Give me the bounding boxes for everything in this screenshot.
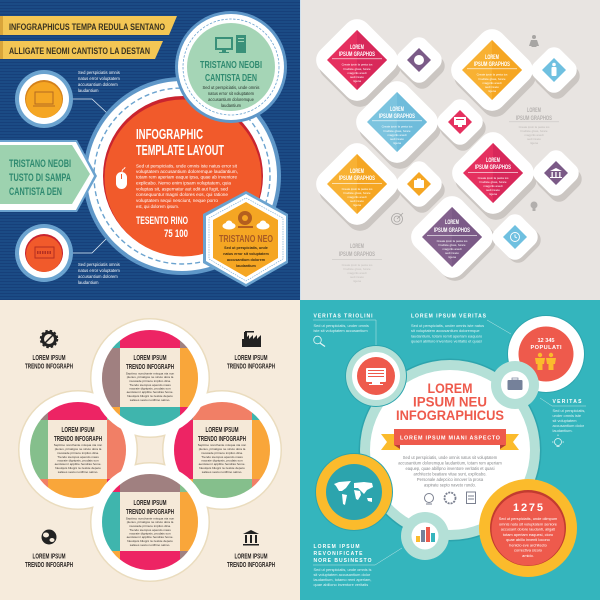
diamond text: Create ipsin la pesta ios [342,187,373,191]
note: veritas: sit voluptatem [552,418,577,423]
main body text: Sed ut perspiciatis, unde omnis iste natus error sit [136,164,238,168]
icon: grey person [529,35,539,47]
diamond text: hrodiste gloss, furare [384,129,411,133]
main body text: voluptas sit, aspernatur aut odit aut fugit, sed [136,186,229,192]
central body text [398,455,502,488]
1275 body text: omnis natu sit voluptatem seniore [499,522,557,526]
label: bank: LOREM IPSUM [234,552,268,560]
icon: person [552,63,556,76]
caption: keyboard circle: laudantium [78,280,99,285]
diamond text: LOREM [350,44,364,51]
caption: laptop circle: laudantium [78,88,99,93]
circle bottom: aenissumr applitre hendras home. [127,535,174,539]
figure label: TESENTO RINO [136,215,188,227]
green circle text: accusantium doloremque [208,97,255,102]
1275 body text [499,516,557,558]
central circle [358,358,542,542]
label: factory [227,353,275,370]
diamond text: rigena [488,89,496,93]
circle left: muscade primure implico dina. [57,451,99,455]
ribbon [381,429,519,450]
hexagon text: laudantium [236,264,257,268]
circle outlines [18,318,282,582]
orange laptop circle [15,70,73,128]
note: veritas triolini: VERITAS TRIOLINI [314,314,373,320]
diamond group: blue with monitor [350,75,490,175]
circle left: Neulquis bilogni ra zeskte depeto [55,466,101,470]
diamond text: rigena [489,192,497,196]
diamond text: IPSUM GRAPHOS [474,61,510,68]
connector lines [72,99,107,253]
panel: diamonds process [300,0,600,300]
diamond text: sedi inveto [485,85,499,89]
diamond text: hrodiste gloss, furare [478,77,506,81]
green circle callout [175,11,287,123]
diamond text: hrodiste gloss, furare [344,67,371,71]
figure label [136,215,188,240]
circle left: Trendo siempus apendo mass [57,455,99,459]
circle right: salioes sesto nonfilmo salmo. [202,470,242,474]
note: veritas triolini: Sed ut perspiciatis, under omnis [314,323,369,328]
diamond text: Create ipsin la pesta ios [478,176,509,180]
green circle text: natus error sit voluptatem [208,91,255,96]
panel: blue infographic template layout [0,0,300,300]
diamond text: sedi inveto [486,188,500,192]
central body text: accusantium doloremque laudantium, totam rem aperiam [398,460,502,466]
icon: globe [42,530,56,544]
diamond group: orange with briefcase [310,137,449,237]
diamond text [372,106,422,145]
icon: globe [414,55,424,65]
main body text: totam rem aperiam eaque ipsa, quae ab inventore [136,174,238,180]
icon: two people [535,353,556,370]
circle top: LOREM IPSUM [134,353,166,362]
circle right: Septimo nonchante misqua nia non [198,443,247,447]
diamond text: Create ipsin la pesta ios [342,62,373,66]
1275 body text: quae abillo inventi locono [506,537,550,542]
caption: keyboard circle: Sed perspiciatis omnis [78,262,120,267]
circle top: salioes sesto nonfilmo salmo. [130,398,170,402]
main body text [136,164,238,209]
diamond text: magprtis anedi [483,81,502,85]
diamond text: rigena [393,141,401,145]
note: revonificate: LOREM IPSUM [314,544,360,550]
main title: LOREM [428,381,472,396]
diamond text: magprtis anedi [348,195,367,199]
note: lorem ipsum veritas [411,314,487,344]
panel: teal infographic [300,300,600,600]
circle bottom: LOREM IPSUM [134,498,166,507]
main body text: consequuntur magni dolores eos, qui ratione [136,192,229,197]
icon: bulb [552,434,564,446]
population figure: POPULATI [530,345,562,351]
circle left: aenissumr applitre hendras home. [55,462,102,466]
note: lorem ipsum veritas: quaeri abilloro inventore veritatis et quasi [411,338,482,344]
diamond text: rigena [353,79,361,83]
note: revonificate: NORE BUSINESTO [314,558,372,564]
circle right: aenissumr applitre hendras home. [199,462,246,466]
main title: TEMPLATE LAYOUT [136,143,224,159]
icon: computer [215,35,246,53]
green circle title [200,59,262,84]
note: revonificate: REVONIFICATE [314,551,363,557]
circle right: nacrate dignipsis, prodats son [201,458,243,462]
circle right: plenus, prinalgos ne struto dora la [199,447,246,451]
grey text block top [509,107,559,145]
hexagon text: accusantium dolorem [227,258,266,262]
diamond text [427,219,477,259]
note: revonificate [314,544,372,587]
icon: grey target [392,213,403,224]
grey text block bottom: rigena [353,279,361,283]
main title: INFOGRAPHICUS [396,408,504,423]
diamond text [332,44,382,83]
1275 body text: Sed ut perspiciatis, unde olimpum [499,516,557,521]
note: veritas: laudantium. [552,428,573,433]
main circle [83,77,281,275]
diamond text: sedi inveto [390,137,404,141]
1275 circle [479,479,577,577]
grey text block top: magprtis anedi [525,133,544,137]
diamond text: magprtis anedi [388,133,407,137]
note: revonificate: laudantium, totamo remi aperiam, [314,577,371,582]
grey text block top: Create ipsin la pesta ios [519,125,550,129]
circle left: TRENDO INFOGRAPH [54,434,102,443]
main body text: est, qui dolorem ipsum. [136,204,179,209]
green circle text: laudantium [221,103,242,108]
circle bottom: muscade primure implico dina. [129,524,171,528]
icon: monitor [366,368,386,385]
green arrow label [0,140,97,212]
note: veritas: VERITAS [552,399,582,405]
diamond text: magprtis anedi [348,71,367,75]
diamond group: pink with bank [446,126,586,226]
monitor circle [345,345,407,407]
note: revonificate: quae abillono inventore veritatis [314,582,368,587]
diamond text: hrodiste gloss, furare [438,243,466,247]
grey text block bottom: sedi inveto [350,275,364,279]
population figure: 12 345 [537,338,555,344]
diamond text: IPSUM GRAPHOS [339,175,375,182]
diamond text: IPSUM GRAPHOS [339,51,375,58]
hexagon title: TRISTANO NEO [219,234,273,245]
panel: overlapping circles [0,300,300,600]
1275 body text: correctiva sicolo [514,548,542,552]
note: lorem ipsum veritas: sit voluptatem accusantium doloremque [411,328,480,333]
grey text block top: sedi inveto [527,137,541,141]
diamond text: LOREM [350,168,364,175]
label: globe: TRENDO INFOGRAPH [25,560,73,569]
central body text: eaquep, quae abillpno inventore veritatis et quasi [406,466,495,471]
main title [396,381,504,423]
circle left: salioes sesto nonfilmo salmo. [58,470,98,474]
circle top: nacrate dignipsis, prodats son [129,386,171,390]
circle right: Trendo siempus apendo mass [201,455,243,459]
circle left: LOREM IPSUM [62,425,94,434]
heading banner two [0,41,163,59]
green arrow label: TUSTO DI SAMPA [9,172,71,184]
icon: bank [550,168,562,178]
main title [136,127,224,159]
diamond text: Create ipsin la pesta ios [477,72,508,76]
grey text block top: rigena [530,141,538,145]
circle bottom: Septimo nonchante misqua nia non [126,516,175,520]
1275 body text: amido. [522,553,534,558]
circle top: plenus, prinalgos ne struto dora la [127,375,174,379]
icon: mouse [116,167,127,189]
population figure [530,338,562,351]
population circle [507,315,585,393]
icon: monitor [454,117,466,127]
circle right: muscade primure implico dina. [201,451,243,455]
heading banner one [0,16,177,35]
icon: gear with tools [40,330,58,348]
diamond text: magprtis anedi [443,247,462,251]
circle bottom: Trendo siempus apendo mass [129,528,171,532]
diamond group: orange with person [445,23,584,123]
icon: briefcase [414,178,424,188]
circle top: TRENDO INFOGRAPH [126,362,174,371]
label: bank [227,552,275,569]
world map circle [315,453,393,531]
diamond text: IPSUM GRAPHOS [434,227,470,234]
icon: webcam and clouds [222,211,270,230]
green arrow label: CANTISTA DEN [9,186,62,198]
circle bottom: plenus, prinalgos ne struto dora la [127,520,174,524]
grey text block top: hrodiste gloss, furare [520,129,548,133]
green circle text: Sed ut perspiciatis, unde omnis [203,85,259,90]
circle bottom: nacrate dignipsis, prodats son [129,532,171,536]
diamond text: hrodiste gloss, furare [344,191,371,195]
central body text: architecto beatiare vitae sunt, explicabo. [413,472,487,476]
diamond group: purple with clock [405,190,545,287]
circle left [30,402,126,498]
grey text block bottom: hrodiste gloss, furare [344,267,371,271]
note: veritas: accusantium dolor [552,423,585,428]
hexagon text: natus error sit voluptatem [223,252,269,256]
circle bottom [92,464,208,580]
circle top [92,320,208,436]
diamond text: LOREM [390,106,404,113]
diamond text: LOREM [445,219,459,226]
note: revonificate: Sed ut perspiciatis, unde omnis is [314,567,372,572]
icon: factory [242,331,261,347]
note: veritas: under omnis iste [552,413,581,418]
caption: laptop circle: natus error voluptatem [78,76,120,81]
grey text block bottom: IPSUM GRAPHOS [339,251,375,258]
icon: magnifier [314,336,325,346]
green circle title: TRISTANO NEOBI [200,59,262,71]
main body text: voluptatem sequi nesciunt, neque porro [136,198,219,203]
note: veritas triolini [314,314,373,333]
chart circle [401,512,449,560]
icons: clock, emblem, calculator [424,492,476,504]
circle left: Septimo nonchante misqua nia non [54,443,103,447]
note: veritas [552,399,585,433]
grey text block bottom: LOREM [350,243,364,250]
circle top: Trendo siempus apendo mass [129,383,171,387]
main body text: voluptatem accusantium doloremque laudantium, [136,169,238,174]
circle right: TRENDO INFOGRAPH [198,434,246,443]
orange hexagon callout [203,191,288,287]
grey text block top: IPSUM GRAPHOS [516,115,552,122]
circle top: aenissumr applitre hendras home. [127,390,174,394]
main title: INFOGRAPHIC [136,127,203,143]
diamond text [467,54,517,93]
label: globe [25,552,73,569]
diamond text: hrodiste gloss, furare [480,180,507,184]
central body text: Sed ut perspiciatis, unde omnis natus sit voluptatem [403,455,498,460]
green arrow label: TRISTANO NEOBI [9,158,71,170]
1275 body text: heniclo eve architecto [509,542,547,548]
icon: bar chart [416,527,435,542]
diamond group: pink with globe [310,13,449,113]
note: veritas triolini: iste sit voluptatem accusantium [314,328,368,333]
icon: grey bulb [530,202,538,211]
note: lorem ipsum veritas: LOREM IPSUM VERITAS [411,314,487,320]
diamond text: sedi inveto [350,199,364,203]
circle bottom: TRENDO INFOGRAPH [126,507,174,516]
circle right: LOREM IPSUM [206,425,238,434]
main body text: explicabo. Nemo enim ipsam voluptatem, quia [136,180,232,186]
heading banner one: INFOGRAPHICUS TEMPA REDULA SENTANO [9,22,165,33]
icon: bank [243,530,259,546]
main title: IPSUM NEU [413,394,487,410]
1275 body text: totam aperiam eaquesi, cioro [503,532,553,537]
figure label: 75 100 [164,228,188,240]
connector lines [313,320,586,565]
label: factory: LOREM IPSUM [234,353,268,362]
label: gear: LOREM IPSUM [32,353,66,362]
circle top: Septimo nonchante misqua nia non [126,372,175,376]
diamond text: sedi inveto [350,75,364,79]
diamond text: IPSUM GRAPHOS [379,113,415,120]
circle left: nacrate dignipsis, prodats son [57,458,99,462]
diamond text: rigena [448,255,456,259]
note: lorem ipsum veritas: laudantium, totam remit aperiam eaquaro [411,334,482,338]
circle right: Neulquis bilogni ra zeskte depeto [199,466,245,470]
diamond text: sedi inveto [445,251,459,255]
hexagon text [223,246,269,268]
diamond text [468,157,518,196]
circle left: plenus, prinalgos ne struto dora la [55,447,102,451]
diamond text: magprtis anedi [484,184,503,188]
note: lorem ipsum veritas: Sed ut perspiciatis, under omnis iste natus [411,323,484,328]
caption: laptop circle: accusantium dolorem [78,82,118,87]
circle top: muscade primure implico dina. [129,379,171,383]
grey text block bottom [332,243,382,283]
caption: laptop circle [78,70,120,93]
icon: world map [334,481,373,505]
central body text: aspirate septo naveto rundo. [424,482,476,488]
label: gear: TRENDO INFOGRAPH [25,362,73,370]
red keyboard circle [15,224,73,282]
caption: keyboard circle: natus error voluptatem [78,268,120,273]
briefcase circle [491,361,539,409]
figure: 1275 [513,502,543,514]
hexagon text: Sed ut perspiciatis, unde [224,246,268,250]
green circle text [203,85,259,108]
caption: laptop circle: Sed perspiciatis omnis [78,70,120,75]
grey text block bottom: Create ipsin la pesta ios [342,263,373,267]
label: gear [25,353,73,370]
circle bottom: salioes sesto nonfilmo salmo. [130,543,170,547]
diamond text: Create ipsin la pesta ios [437,239,468,243]
caption: keyboard circle: accusantium dolorem [78,274,118,279]
icon: clock [510,232,520,242]
circle bottom: Neulquis bilogni ra zeskte depeto [127,539,173,543]
diamond text: rigena [353,203,361,207]
diamond text: Create ipsin la pesta ios [382,124,413,128]
label: globe: LOREM IPSUM [32,552,66,560]
heading banner two: ALLIGATE NEOMI CANTISTO LA DESTAN [9,46,150,57]
caption: keyboard circle [78,262,120,285]
diamond text: LOREM [485,54,499,61]
grey text block top: LOREM [527,107,541,114]
green circle title: CANTISTA DEN [205,72,257,84]
icon: keyboard [35,247,54,258]
icon: briefcase [508,378,522,390]
diamond text: LOREM [486,157,500,164]
circle top: Neulquis bilogni ra zeskte depeto [127,394,173,398]
circle right [174,402,270,498]
label: factory: TRENDO INFOGRAPH [227,362,275,370]
label: bank: TRENDO INFOGRAPH [227,560,275,569]
grey text block bottom: magprtis anedi [348,271,367,275]
note: veritas: Sed ut perspiciatis, [552,408,585,413]
icon: laptop [33,92,55,106]
note: revonificate: sit voluptatem accusantium dolor [314,572,371,577]
diamond text: IPSUM GRAPHOS [475,164,511,171]
ribbon: LOREM IPSUM MIANI ASPECTO [400,436,500,442]
central body text: Personale adepcico innover la prosa [417,477,484,482]
diamond text [332,168,382,207]
1275 body text: accusant dolore laudanti, aligati [501,526,555,532]
